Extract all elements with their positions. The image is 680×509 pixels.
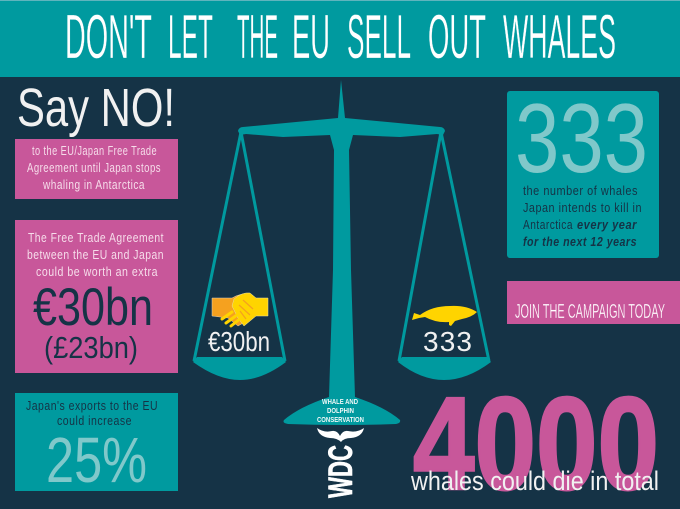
left pan label: €30bn xyxy=(208,326,270,357)
panel: trade agreement value: could be worth an extra xyxy=(36,265,158,279)
title: OUT xyxy=(428,3,486,72)
panel: exports increase xyxy=(15,393,178,496)
panel: trade agreement value xyxy=(15,220,178,373)
base label: WHALE AND xyxy=(322,397,358,406)
title: LET xyxy=(168,3,213,72)
scale base xyxy=(284,396,400,425)
heading: Say NO!: Say NO! xyxy=(17,78,175,138)
right pan xyxy=(398,132,491,380)
logo: WDC whale tail: WDC xyxy=(322,445,360,498)
base label: CONSERVATION xyxy=(317,415,364,424)
base label xyxy=(317,397,364,424)
panel: join the campaign xyxy=(507,281,680,324)
panel: exports increase: could increase xyxy=(57,414,132,428)
panel: 333 whales: Antarctica xyxy=(523,218,573,232)
panel: 333 whales: every year xyxy=(577,218,637,232)
panel: 333 whales: 333 xyxy=(515,83,648,193)
right pan label: 333 xyxy=(423,326,472,357)
panel: exports increase: Japan's exports to the EU xyxy=(26,399,158,413)
panel: exports increase: 25% xyxy=(46,424,147,496)
panel: trade agreement value: (£23bn) xyxy=(44,330,138,365)
panel: say no text: to the EU/Japan Free Trade xyxy=(32,144,157,158)
base label: DOLPHIN xyxy=(327,406,354,415)
header banner xyxy=(0,0,680,77)
balance scale xyxy=(193,80,491,498)
panel: trade agreement value: €30bn xyxy=(33,278,153,337)
left pan xyxy=(193,132,286,380)
title: DON'T xyxy=(65,3,152,72)
title: THE xyxy=(237,3,278,72)
title: EU xyxy=(292,3,330,72)
panel: say no text: whaling in Antarctica xyxy=(42,178,145,192)
panel: 333 whales: for the next 12 years xyxy=(523,235,637,249)
scale post and beam xyxy=(238,80,445,397)
panel: 333 whales: Japan intends to kill in xyxy=(523,201,642,215)
icon: whale xyxy=(412,306,477,326)
icon: handshake xyxy=(212,293,268,326)
panel: say no text: Agreement until Japan stops xyxy=(27,161,161,175)
panel: trade agreement value: between the EU and Japan xyxy=(27,248,164,262)
panel: 333 whales xyxy=(507,83,659,258)
panel: say no text xyxy=(15,139,178,199)
panel: trade agreement value: The Free Trade Agreement xyxy=(28,231,164,245)
panel: 333 whales: the number of whales xyxy=(523,184,638,198)
title xyxy=(65,3,616,72)
title: SELL xyxy=(347,3,411,72)
